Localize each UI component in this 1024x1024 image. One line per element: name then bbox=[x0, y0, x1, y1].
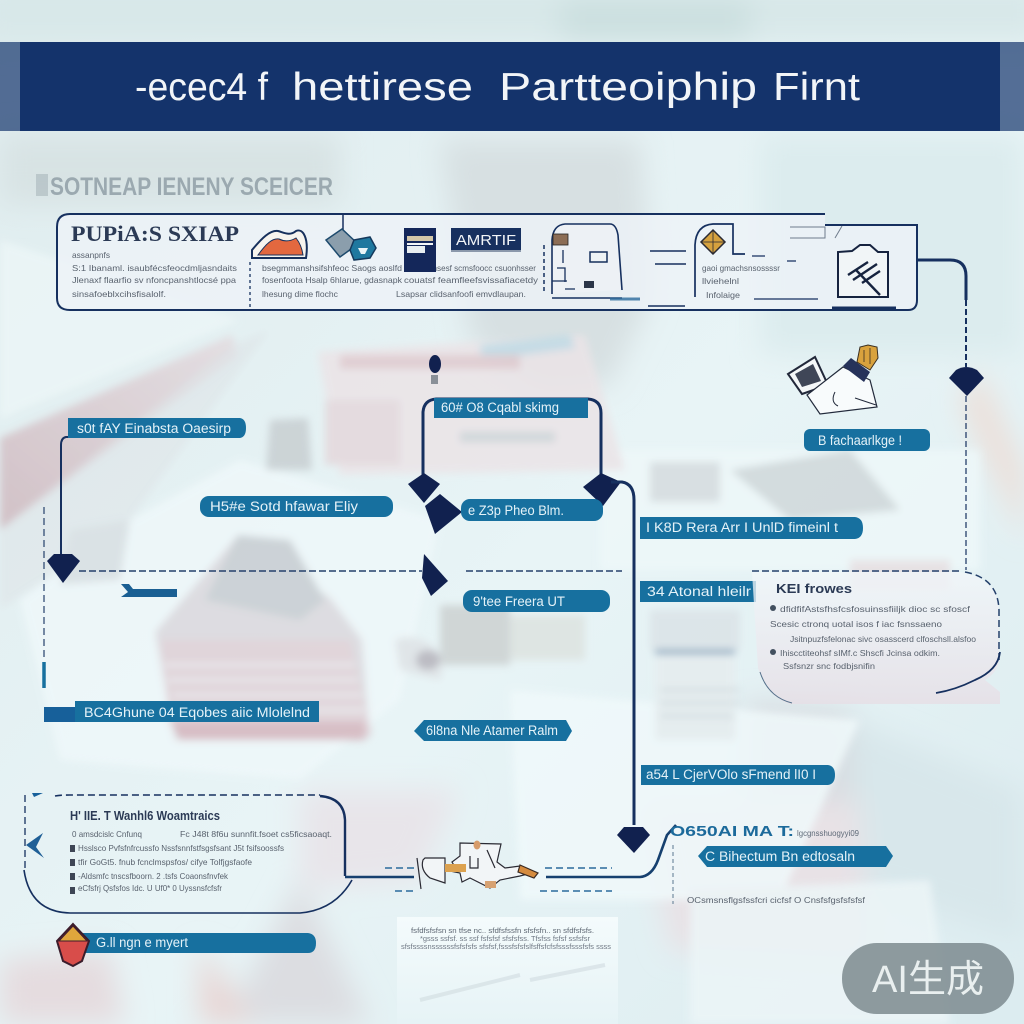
label: right tag 3 bbox=[641, 765, 835, 785]
icon: diamond mid bbox=[425, 494, 462, 534]
misc machine patches bbox=[60, 520, 130, 585]
right flow connector bbox=[611, 482, 650, 853]
label: recharge pill bbox=[804, 429, 930, 451]
title text: Firnt bbox=[773, 66, 860, 109]
card with diamond icon: llviehelnl bbox=[702, 276, 739, 286]
stack on sheet bbox=[155, 535, 370, 740]
notes text: Jsitnpuzfsfelonac sivc osasscerd clfoschsll.alsfoo bbox=[790, 634, 976, 644]
third text column bbox=[396, 263, 539, 299]
second text column: bsegmmanshsifshfeoc Saogs aoslfd bbox=[262, 263, 402, 273]
second text column: lhesung dime flochc bbox=[262, 289, 339, 299]
icon: device sheet bbox=[552, 224, 640, 299]
label: right tag 1 bbox=[640, 517, 863, 539]
label: centre pill bbox=[414, 720, 572, 741]
notes text: Ssfsnzr snc fodbjsnifin bbox=[783, 661, 875, 671]
label: dark badge: AMRTIF bbox=[456, 232, 516, 249]
panel: bottom centre note: *gsss ssfsf. ss ssf fsfsfsf sfsfsfss. Tfsfss fsfsf ssfsfsr bbox=[420, 936, 591, 943]
third text column: couatsf feamfleefsvissafiacetdy bbox=[404, 275, 539, 285]
notes text bbox=[70, 829, 332, 894]
panel: bottom centre note: fsfdfsfsfsn sn tfse nc.. sfdfsfssfn sfsfsfn.. sn sfdfsfsfs. bbox=[411, 926, 594, 935]
notes text: 0 amsdcislc Cnfunq bbox=[72, 829, 142, 839]
icon: small top marker bbox=[429, 355, 441, 384]
icon: left diamond bbox=[47, 554, 80, 583]
panel: bottom left notes bbox=[24, 793, 352, 913]
bottom tag with gem icon bbox=[57, 924, 316, 966]
label: recharge pill: B fachaarlkge ! bbox=[818, 433, 902, 448]
icon: right diamond bbox=[949, 367, 984, 396]
left vertical line bbox=[43, 507, 45, 688]
illustration: worker at desk bbox=[417, 840, 538, 889]
third text column: Lsapsar clidsanfoofi emvdlaupan. bbox=[396, 289, 526, 299]
connector: strip to right diamond bbox=[917, 260, 984, 570]
label: bottom left wide: BC4Ghune 04 Eqobes aiic Mlolelnd bbox=[84, 705, 310, 720]
panel: top process strip bbox=[57, 214, 917, 310]
notes text bbox=[770, 604, 976, 671]
illustration: gloved hand bbox=[788, 345, 878, 414]
label: education pill: C Bihectum Bn edtosaln bbox=[705, 849, 855, 864]
notes text: Scesic ctronq uotal isos f iac fsnssaeno bbox=[770, 619, 942, 629]
flow loop: central connector bbox=[408, 399, 621, 596]
panel: right notes bbox=[752, 572, 1000, 704]
label: right tag 3: a54 L CjerVOlo sFmend lI0 I bbox=[646, 767, 816, 782]
label: free pill: 9'tee Freera UT bbox=[473, 594, 565, 609]
icon: gem bbox=[57, 924, 89, 966]
connector lines bbox=[648, 251, 686, 306]
first text column: S:1 Ibanaml. isaubfécsfeocdmljasndaits bbox=[72, 263, 237, 273]
title banner bbox=[0, 42, 1024, 131]
label: right tag 2: 34 Atonal hleilr bbox=[647, 584, 752, 599]
panel: bottom centre note: sfsfssssnssssssfsfsfsfs sfsfsf,fsssfsfsfslfsffsfcfsfsssfsssfsfs ssss bbox=[401, 944, 612, 951]
label: capabilities: 60# O8 Cqabl skimg bbox=[441, 400, 559, 415]
caption: bottom right: OCsmsnsflgsfssfcri cicfsf O Cnsfsfgsfsfsfsf bbox=[687, 895, 866, 905]
watermark badge bbox=[842, 943, 1014, 1014]
notes heading: KEI frowes bbox=[776, 581, 852, 596]
second text column: fosenfoota Hsalp 6hlarue, gdasnapk bbox=[262, 275, 403, 285]
label: center left pill: H5#e Sotd hfawar Eliy bbox=[210, 499, 358, 514]
icon: orange mound bbox=[252, 230, 307, 258]
connector: left tag to left diamond bbox=[47, 437, 80, 583]
label: capabilities bbox=[434, 398, 588, 418]
title text: Partteoiphip bbox=[499, 66, 757, 109]
pink streaks bbox=[0, 335, 238, 530]
title text: -ecec4 f bbox=[135, 66, 268, 109]
label: left top tag bbox=[68, 418, 246, 438]
small dark marker bbox=[121, 584, 177, 597]
faded section heading: SOTNEAP IENENY SCEICER bbox=[50, 173, 333, 201]
notes text: tfir GoGt5. fnub fcnclmspsfos/ cifye Tolfjgsfaofe bbox=[78, 857, 252, 867]
card with diamond icon bbox=[695, 224, 818, 300]
heading: open market: O650AI MA T: bbox=[670, 823, 794, 840]
panel: bottom centre note bbox=[397, 917, 618, 1024]
second text column bbox=[262, 263, 403, 299]
card with diamond icon: Infolaige bbox=[706, 290, 740, 300]
heading: open market: lgcgnsshuogyyi09 bbox=[797, 829, 860, 838]
heading: open market bbox=[670, 823, 860, 840]
notes text: Fc J48t 8f6u sunnfit.fsoet cs5ficsaoaqt. bbox=[180, 829, 332, 839]
label: free pill bbox=[463, 590, 610, 612]
panel heading: PUPiA:S SXIAP bbox=[71, 221, 239, 246]
label: bottom left wide bbox=[44, 701, 319, 722]
bottom tag with gem icon: G.ll ngn e myert bbox=[96, 935, 188, 950]
notes text: Ihiscctiteohsf sIMf.c Shscfi Jcinsa odkim. bbox=[780, 648, 940, 658]
label: education pill bbox=[698, 846, 893, 867]
notes text: eCfsfrj Qsfsfos Idc. U Uf0* 0 Uyssnsfcfsfr bbox=[78, 883, 222, 893]
label: phase pill: e Z3p Pheo Blm. bbox=[468, 503, 564, 518]
label: right tag 1: I K8D Rera Arr I UnlD fimeinl t bbox=[646, 520, 838, 535]
pale sheets bbox=[0, 240, 240, 420]
watermark badge: AI生成 bbox=[872, 959, 984, 1001]
icon: framed tool sign bbox=[790, 226, 896, 308]
icon: tablet and badge bbox=[326, 229, 376, 260]
central paper stack upper bbox=[318, 335, 625, 475]
notes heading: H' IIE. T Wanhl6 Woamtraics bbox=[70, 808, 220, 823]
first text column bbox=[72, 250, 237, 299]
first text column: assanpnfs bbox=[72, 250, 110, 260]
icon: diamond lower bbox=[422, 554, 448, 596]
connector through bottom illustration bbox=[345, 825, 676, 891]
icon: chevron bbox=[26, 833, 44, 858]
first text column: Jlenaxf flaarfio sv nfoncpanshtlocsé ppa bbox=[72, 275, 236, 285]
label: dark badge bbox=[451, 228, 521, 252]
icon: folder bbox=[404, 228, 436, 272]
third text column: asmmfmsesf scmsfoocc csuonhsser bbox=[406, 263, 536, 273]
label: center left pill bbox=[200, 496, 393, 517]
notes text: dfidfifAstsfhsfcsfosuinssfiiljk dioc sc sfoscf bbox=[780, 604, 971, 614]
dashed divider bbox=[543, 245, 545, 292]
label: right tag 2 bbox=[640, 581, 756, 602]
icon: bottom diamond bbox=[617, 827, 650, 853]
icon: diamond left bbox=[408, 473, 440, 503]
label: phase pill bbox=[461, 499, 603, 521]
label: left top tag: s0t fAY Einabsta Oaesirp bbox=[77, 421, 231, 436]
dashed horizontal flow line bbox=[79, 570, 960, 572]
icon: diamond right bbox=[583, 473, 621, 506]
card with diamond icon: gaoi gmachsnsossssr bbox=[702, 263, 780, 273]
title text: hettirese bbox=[292, 66, 473, 109]
title text bbox=[135, 66, 860, 109]
label: centre pill: 6l8na Nle Atamer Ralm bbox=[426, 723, 558, 738]
notes text: -Aldsmfc tnscsfboorn. 2 .tsfs Coaonsfnvfek bbox=[78, 871, 229, 881]
first text column: sinsafoeblxcihsfisalolf. bbox=[72, 289, 166, 299]
notes text: Hsslsco Pvfsfnfrcussfo Nssfsnnfstfsgsfsant J5t fsifsoossfs bbox=[78, 843, 284, 853]
